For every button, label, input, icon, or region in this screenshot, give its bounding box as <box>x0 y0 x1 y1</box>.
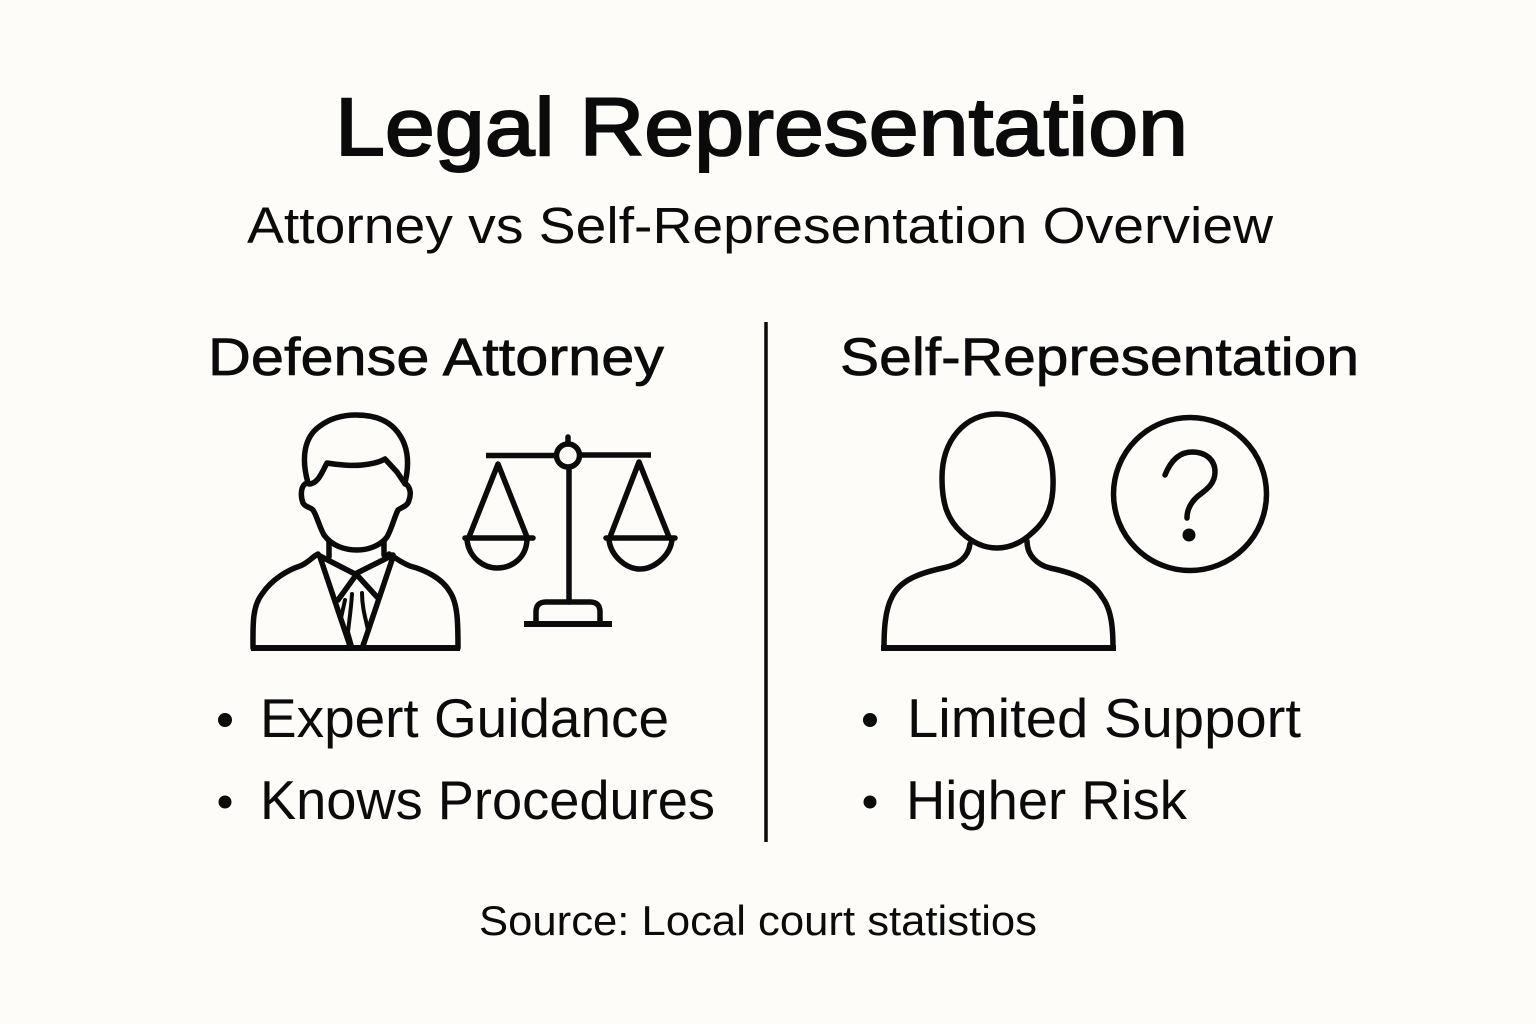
icon: scales of justice <box>465 437 675 624</box>
icon: attorney <box>251 415 460 648</box>
center divider <box>764 322 768 842</box>
bullets: self-representation <box>863 687 1301 831</box>
heading: defense attorney: Defense Attorney <box>208 328 665 387</box>
title: Legal Representation <box>335 82 1188 173</box>
source note: Source: Local court statistios <box>479 897 1037 944</box>
subtitle: Attorney vs Self-Representation Overview <box>247 197 1273 254</box>
icon: question mark in circle <box>1114 418 1266 570</box>
heading: self-representation: Self-Representation <box>840 328 1359 387</box>
bullets: defense attorney: Expert Guidance <box>260 687 669 749</box>
bullets: defense attorney <box>218 687 715 831</box>
bullets: defense attorney: Knows Procedures <box>260 769 715 831</box>
bullets: self-representation: Higher Risk <box>906 769 1187 831</box>
icon: person silhouette <box>881 414 1116 648</box>
bullets: self-representation: Limited Support <box>907 687 1301 749</box>
